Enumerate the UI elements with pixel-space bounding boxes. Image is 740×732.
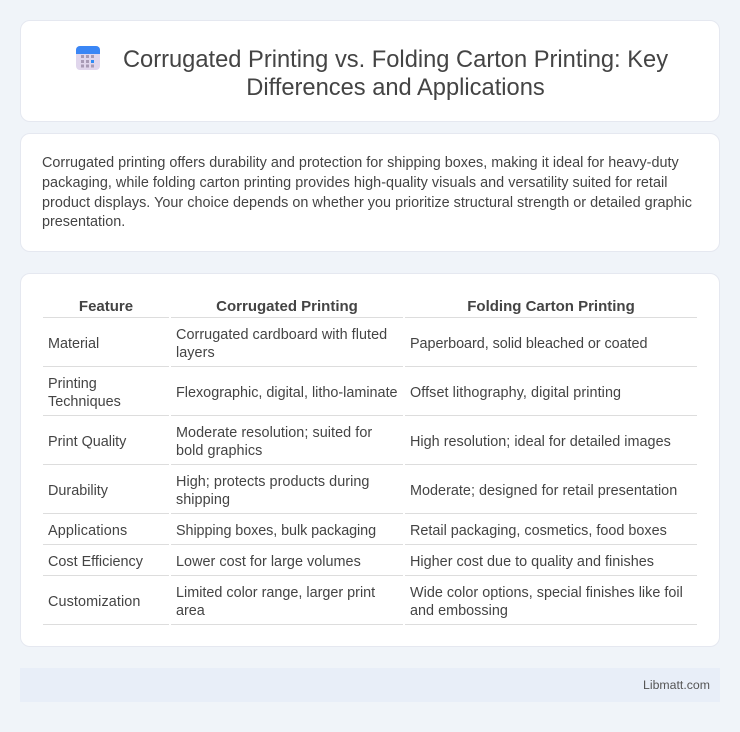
intro text: product displays. Your choice depends on whether you prioritize structural strength or detailed graphic xyxy=(42,195,692,211)
column header: Corrugated Printing: Corrugated Printing xyxy=(216,298,358,315)
cell: Lower cost for large volumes xyxy=(176,554,361,570)
cell xyxy=(176,425,372,459)
cell: Wide color options, special finishes like foil xyxy=(410,585,683,601)
row: Cost Efficiency: Cost Efficiency xyxy=(48,554,143,570)
cell: High; protects products during xyxy=(176,474,369,490)
intro text: packaging, while folding carton printing provides high-quality visuals and versatility suited for retail xyxy=(42,175,667,191)
cell: High resolution; ideal for detailed images xyxy=(410,434,671,450)
column header: Feature: Feature xyxy=(79,298,133,315)
cell: Shipping boxes, bulk packaging xyxy=(176,523,376,539)
cell: Corrugated cardboard with fluted xyxy=(176,327,387,343)
cell: area xyxy=(176,603,205,619)
title: Corrugated Printing vs. Folding Carton Printing: Key xyxy=(123,46,668,72)
row: Durability: Durability xyxy=(48,483,108,499)
footer text: Libmatt.com xyxy=(643,678,710,692)
row: Printing Techniques: Printing xyxy=(48,376,97,392)
row: Customization: Customization xyxy=(48,594,140,610)
column header: Folding Carton Printing: Folding Carton Printing xyxy=(467,298,635,315)
row: Printing Techniques: Techniques xyxy=(48,394,121,410)
intro text xyxy=(42,155,692,230)
cell: Offset lithography, digital printing xyxy=(410,385,621,401)
cell: Higher cost due to quality and finishes xyxy=(410,554,654,570)
intro text: Corrugated printing offers durability and protection for shipping boxes, making it ideal for heavy-duty xyxy=(42,155,679,171)
cell: layers xyxy=(176,345,215,361)
cell: bold graphics xyxy=(176,443,262,459)
cell: Retail packaging, cosmetics, food boxes xyxy=(410,523,667,539)
cell xyxy=(176,474,369,508)
cell: and embossing xyxy=(410,603,508,619)
cell: Limited color range, larger print xyxy=(176,585,375,601)
panel: intro xyxy=(20,133,720,252)
cell xyxy=(176,585,376,619)
cell xyxy=(410,585,683,619)
panel: comparison table xyxy=(20,273,720,647)
cell: Moderate; designed for retail presentation xyxy=(410,483,677,499)
cell: Paperboard, solid bleached or coated xyxy=(410,336,647,352)
panel: header xyxy=(20,20,720,122)
row: Material: Material xyxy=(48,336,99,352)
cell xyxy=(176,327,387,361)
title xyxy=(123,46,668,100)
icon: calendar xyxy=(76,46,100,70)
row: Printing Techniques xyxy=(48,376,121,410)
row: Print Quality: Print Quality xyxy=(48,434,126,450)
title: Differences and Applications xyxy=(246,74,545,100)
cell: Flexographic, digital, litho-laminate xyxy=(176,385,398,401)
cell: shipping xyxy=(176,492,230,508)
intro text: presentation. xyxy=(42,214,125,230)
footer bar xyxy=(20,668,720,702)
cell: Moderate resolution; suited for xyxy=(176,425,372,441)
row: Applications: Applications xyxy=(48,523,127,539)
